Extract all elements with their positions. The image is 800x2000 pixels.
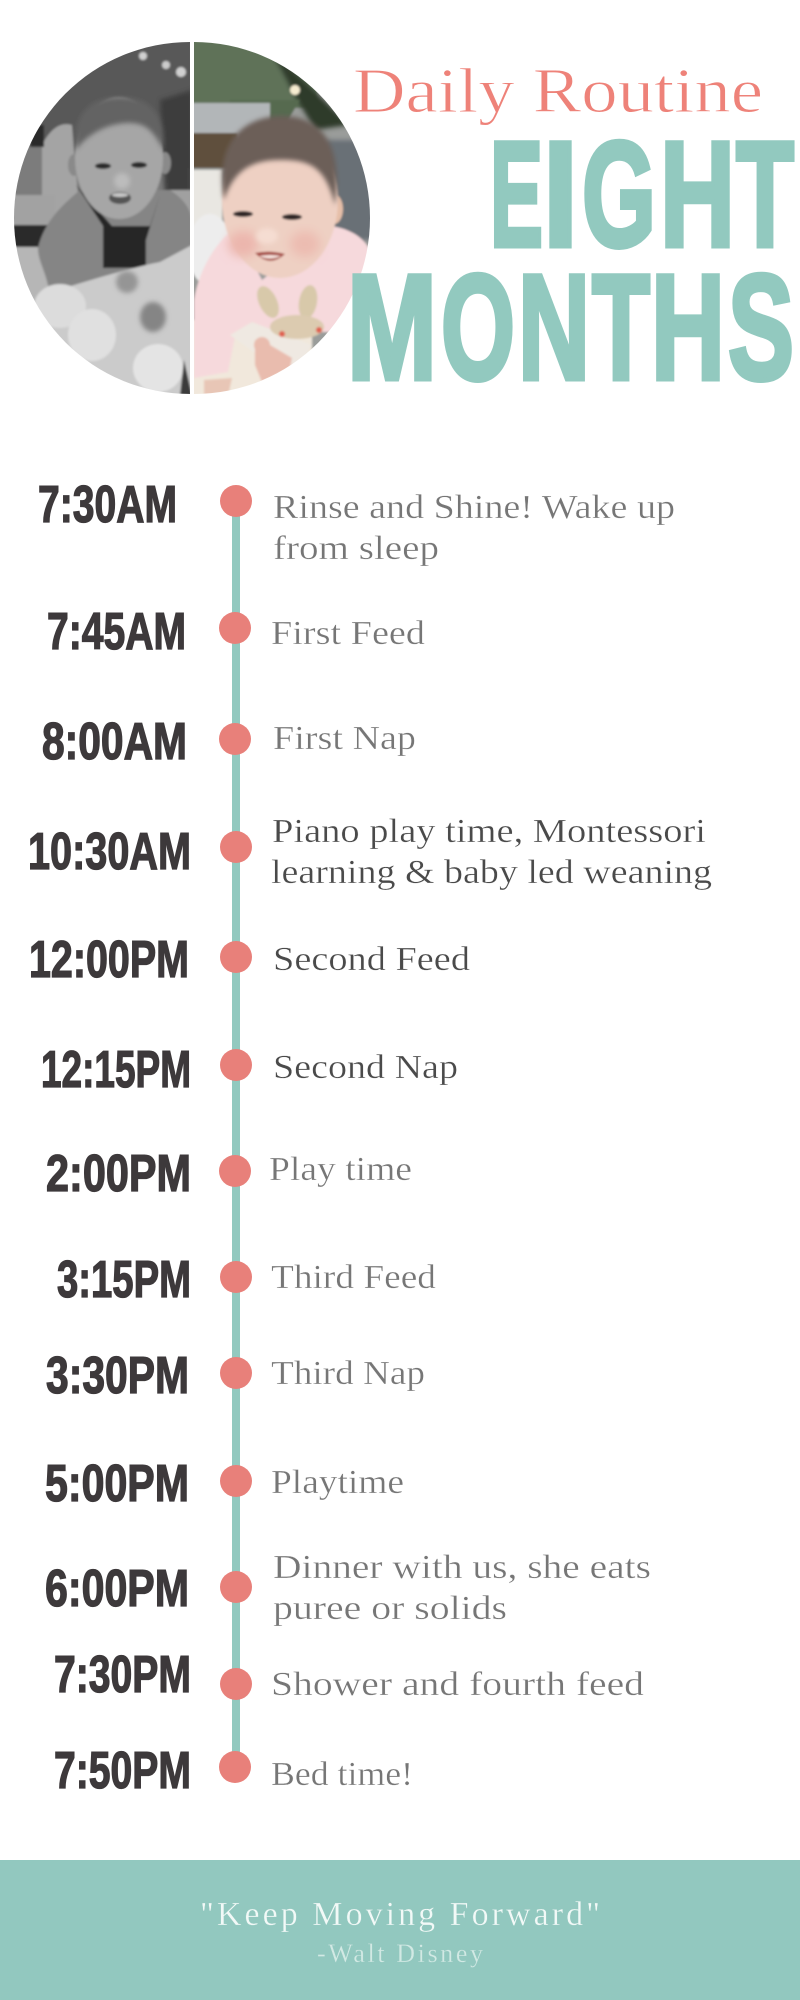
description: from sleep	[273, 530, 439, 567]
entry: 7:45AM	[47, 603, 425, 661]
ears	[68, 154, 76, 176]
photo: colour baby, right half	[188, 38, 375, 400]
head	[221, 157, 340, 278]
jacket	[38, 190, 192, 295]
time: 5:00PM	[45, 1455, 189, 1513]
timeline line	[232, 501, 240, 1767]
white pants	[232, 322, 271, 338]
entry: 3:30PM	[46, 1347, 425, 1405]
dot	[220, 1668, 252, 1700]
dot	[219, 612, 251, 644]
time: 10:30AM	[28, 823, 191, 881]
time: 6:00PM	[45, 1560, 189, 1618]
entry: 5:00PM	[45, 1455, 404, 1513]
photo: black and white baby, left half	[10, 38, 192, 398]
baby foot	[254, 345, 292, 380]
plush toy	[51, 244, 190, 394]
entry: 2:00PM	[46, 1145, 412, 1203]
time: 12:00PM	[29, 931, 189, 989]
description: Dinner with us, she eats	[273, 1549, 651, 1586]
title: MONTHS: O	[441, 243, 515, 411]
title: EIGHT: H	[660, 110, 735, 278]
bunny print	[256, 286, 280, 319]
entry: 7:30AM	[38, 476, 675, 567]
entry: 8:00AM	[42, 713, 416, 771]
description: Play time	[269, 1151, 412, 1188]
entry: 6:00PM	[45, 1549, 651, 1627]
description: Second Nap	[273, 1049, 458, 1086]
description: First Nap	[273, 720, 416, 757]
title: EIGHT: G	[582, 110, 656, 278]
description: Second Feed	[273, 941, 470, 978]
head	[75, 97, 163, 219]
time: 2:00PM	[46, 1145, 191, 1203]
entry: 12:00PM	[29, 931, 470, 989]
dot	[220, 1261, 252, 1293]
photo: split circle portrait	[10, 38, 375, 400]
dot	[220, 1357, 252, 1389]
time: 7:50PM	[54, 1742, 191, 1800]
dot	[220, 1049, 252, 1081]
footer band	[0, 1860, 800, 2000]
entry: 7:30PM	[54, 1646, 644, 1704]
entry: 7:50PM	[54, 1742, 413, 1800]
time: 7:45AM	[47, 603, 186, 661]
dot	[220, 1571, 252, 1603]
time: 7:30PM	[54, 1646, 191, 1704]
ear	[334, 195, 345, 225]
entry: 12:15PM	[41, 1041, 458, 1099]
description: Shower and fourth feed	[271, 1666, 644, 1703]
quote: "Keep Moving Forward"	[200, 1896, 600, 1933]
description: learning & baby led weaning	[271, 854, 712, 891]
title: MONTHS: T	[592, 243, 650, 411]
description: First Feed	[271, 615, 425, 652]
description: puree or solids	[273, 1590, 507, 1627]
dot	[219, 1751, 251, 1783]
description: Piano play time, Montessori	[272, 813, 706, 850]
entry: 10:30AM	[28, 813, 712, 891]
description: Third Nap	[271, 1355, 425, 1392]
attribution: -Walt Disney	[317, 1939, 483, 1968]
title: EIGHT: E	[490, 110, 543, 278]
heading: Daily Routine: Daily Routine	[353, 55, 763, 126]
time: 3:30PM	[46, 1347, 189, 1405]
title: MONTHS: N	[518, 243, 590, 411]
entry: 3:15PM	[57, 1251, 436, 1309]
fluffy blanket	[192, 320, 312, 400]
description: Bed time!	[271, 1756, 413, 1793]
time: 8:00AM	[42, 713, 187, 771]
dot	[220, 485, 252, 517]
dot	[219, 723, 251, 755]
dot	[220, 941, 252, 973]
pink top	[194, 226, 372, 378]
dot	[220, 1465, 252, 1497]
time: 7:30AM	[38, 476, 177, 534]
title: EIGHT: I	[543, 110, 578, 278]
title: MONTHS: M	[347, 243, 437, 411]
time: 3:15PM	[57, 1251, 191, 1309]
description: Rinse and Shine! Wake up	[273, 489, 675, 526]
time: 12:15PM	[41, 1041, 191, 1099]
dot	[220, 831, 252, 863]
description: Third Feed	[271, 1259, 436, 1296]
dot	[219, 1155, 251, 1187]
title: MONTHS: H	[651, 243, 725, 411]
description: Playtime	[271, 1464, 404, 1501]
